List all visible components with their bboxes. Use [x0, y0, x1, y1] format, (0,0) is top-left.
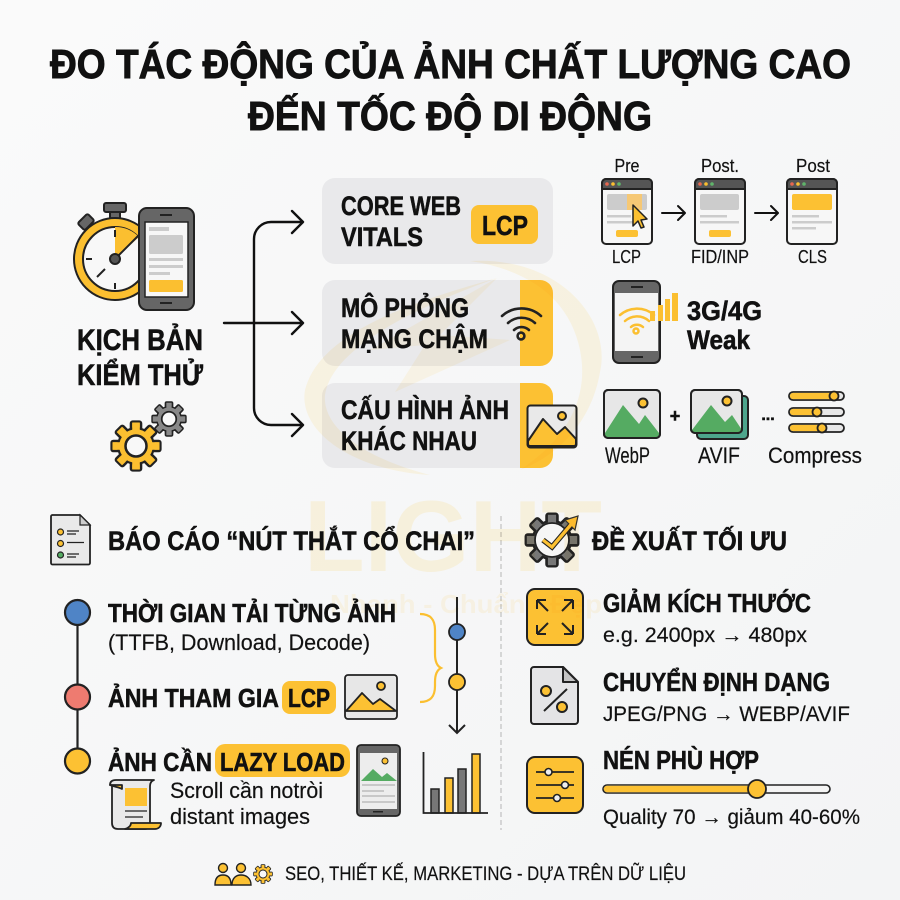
window: LCP: [602, 179, 652, 244]
scenario label: KỊCH BẢN: [77, 323, 203, 357]
icon: phone with signal: [613, 281, 678, 363]
timeline: [65, 600, 90, 774]
divider: [500, 516, 502, 830]
item: LCP image: ẢNH THAM GIA: [108, 683, 279, 713]
heading: ĐỀ XUẤT TỐI ƯU: [592, 524, 787, 556]
item: load time: [108, 598, 396, 655]
icon: phone: [139, 208, 194, 310]
timeline arrow: [449, 597, 465, 733]
footer: [215, 863, 686, 885]
icon: percent file: [531, 667, 578, 724]
panel: core web vitals: VITALS: [341, 222, 423, 252]
labels: metrics: CLS: [798, 247, 827, 267]
brace: [420, 614, 441, 702]
labels: metrics: FID/INP: [691, 247, 749, 267]
icon: sliders: [527, 757, 583, 813]
icon: gears: [112, 402, 186, 470]
item: lazy load: LAZY LOAD: [220, 749, 345, 777]
item: load time: THỜI GIAN TẢI TỪNG ẢNH: [108, 598, 396, 628]
label: 3G/4G weak: Weak: [687, 325, 751, 355]
item: lazy load: Scroll cần notròi: [170, 778, 323, 803]
icon: compress sliders: [789, 392, 844, 432]
icon: image: [528, 406, 576, 448]
labels: phases: Post: [796, 156, 830, 176]
item: reduce size: GIẢM KÍCH THƯỚC: [603, 588, 811, 618]
panel: slow network: [322, 280, 553, 366]
item: LCP image: LCP: [288, 685, 330, 713]
icon: wifi: [502, 308, 541, 339]
title: [50, 41, 851, 139]
icon: report document: [51, 515, 90, 564]
ellipsis: ...: [761, 407, 775, 424]
scenario label: KIỂM THỬ: [77, 358, 203, 392]
panel: bottleneck report: [51, 515, 488, 829]
item: lazy load: distant images: [170, 804, 310, 829]
panel: image formats: [604, 390, 862, 468]
labels: metrics: [612, 247, 827, 267]
icon: gear with check: [526, 514, 578, 566]
arrows: sequence: [662, 206, 778, 220]
icon: stopwatch: [74, 203, 156, 300]
panel: weak signal: [613, 281, 762, 363]
panel: image configs: KHÁC NHAU: [341, 426, 477, 456]
panel: core web vitals: [322, 178, 553, 264]
arrows: branching: [224, 211, 303, 436]
icon: people and gear: [215, 864, 272, 885]
item: compression: [603, 745, 860, 829]
footer text: SEO, THIẾT KẾ, MARKETING - DỰA TRÊN DỮ LIỆU: [285, 863, 686, 885]
window: CLS: [787, 179, 837, 244]
icon: WebP: [604, 390, 660, 438]
item: lazy load: [108, 744, 350, 829]
item: compression: Quality 70 → giảum 40-60%: [603, 806, 860, 829]
panel: recommendations: [526, 514, 860, 829]
panel: core web vitals: CORE WEB: [341, 191, 461, 221]
icon: AVIF: [691, 390, 748, 439]
title: ĐẾN TỐC ĐỘ DI ĐỘNG: [248, 93, 652, 139]
labels: phases: Post.: [701, 156, 739, 176]
bar chart: [424, 752, 488, 813]
item: reduce size: e.g. 2400px → 480px: [603, 624, 807, 647]
labels: formats: WebP: [605, 443, 650, 468]
icon: small phone: [357, 745, 400, 816]
icon: image: [345, 675, 397, 719]
panel: test scenario: [74, 203, 203, 470]
watermark: LIGHT: [304, 481, 602, 593]
window: FID/INP: [695, 179, 745, 244]
labels: metrics: LCP: [612, 247, 641, 267]
item: convert format: [603, 667, 850, 726]
watermark: Nhanh - Chuẩn - Đẹp: [330, 589, 602, 619]
icon: scroll: [110, 780, 161, 829]
item: convert format: JPEG/PNG → WEBP/AVIF: [603, 703, 850, 726]
labels: formats: Compress: [768, 443, 862, 468]
panel: slow network: MẠNG CHẬM: [341, 324, 488, 354]
label: 3G/4G weak: 3G/4G: [687, 296, 762, 326]
panel: image configs: [322, 383, 576, 468]
panel: slow network: MÔ PHỎNG: [341, 293, 469, 323]
watermark: [304, 261, 602, 619]
item: lazy load: ẢNH CẦN: [108, 747, 212, 777]
labels: formats: [605, 443, 862, 468]
panel: image configs: CẤU HÌNH ẢNH: [341, 395, 509, 425]
item: convert format: CHUYỂN ĐỊNH DẠNG: [603, 667, 830, 697]
label: 3G/4G weak: [687, 296, 762, 355]
labels: phases: Pre: [614, 156, 640, 176]
badge: LCP: LCP: [482, 210, 528, 241]
labels: formats: AVIF: [698, 443, 740, 468]
item: LCP image: [108, 675, 397, 719]
panel: metric windows: [602, 156, 837, 267]
plus: +: [670, 406, 680, 426]
badge: LCP: [471, 205, 538, 244]
item: compression: NÉN PHÙ HỢP: [603, 745, 759, 775]
item: reduce size: [603, 588, 811, 647]
heading: BÁO CÁO “NÚT THẮT CỔ CHAI”: [108, 525, 475, 556]
icon: resize: [527, 589, 583, 645]
item: load time: (TTFB, Download, Decode): [108, 630, 370, 655]
scenario label: [77, 323, 203, 392]
labels: phases: [614, 156, 830, 176]
